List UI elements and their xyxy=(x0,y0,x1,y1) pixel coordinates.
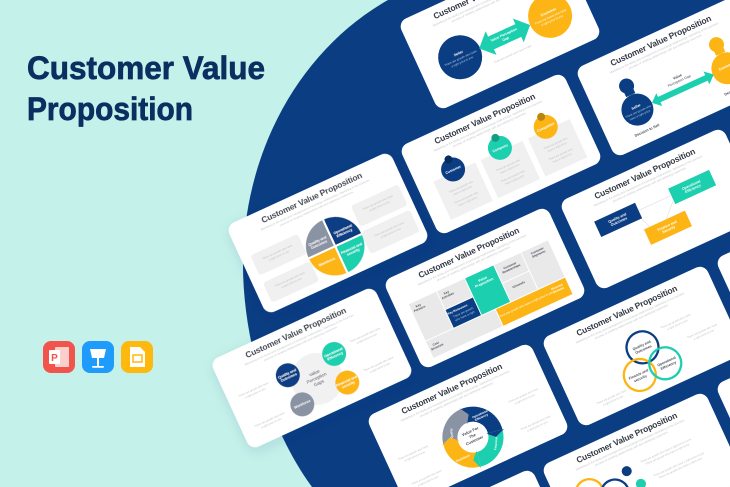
double arrow xyxy=(474,13,536,60)
channels xyxy=(503,272,537,301)
cost structure: Structure xyxy=(430,342,444,351)
quality xyxy=(594,203,642,237)
center circle xyxy=(283,344,352,413)
panel text: a right price to you xyxy=(281,276,303,289)
side text: a right price to you xyxy=(369,361,391,374)
pie chart: Operational xyxy=(333,223,353,235)
side text: There are growth who have xyxy=(397,444,429,461)
side text: There are growth who have xyxy=(507,387,539,404)
cycle center label xyxy=(461,425,484,446)
card: three columns: process of creating relationships with and satisfying customers. xyxy=(452,111,527,148)
panel text: There are growth who have xyxy=(362,194,394,211)
cycle labels: Efficiency xyxy=(474,412,489,422)
side text: a right price to you xyxy=(244,386,267,399)
card: pie: Customer Value Proposition xyxy=(260,170,364,225)
venn labels: Operational xyxy=(657,356,677,368)
double arrow: Value Perception xyxy=(490,27,518,43)
venn rings xyxy=(609,320,686,396)
pie chart: Efficiency xyxy=(336,228,353,238)
quality: Quality and xyxy=(608,212,627,224)
card: bottom right: process of creating relationships with and satisfying customers. xyxy=(594,430,669,467)
card: venn: Customer Value Proposition xyxy=(575,283,679,338)
competitor xyxy=(529,107,575,165)
key partners: Partners xyxy=(413,304,426,313)
workforce xyxy=(286,388,318,420)
cycle center label: Customer xyxy=(465,434,484,446)
card: business model canvas: Marketing is the study and management of exchange relationships. Marketing is the business xyxy=(417,233,528,287)
panel text: There are growth who have xyxy=(274,270,306,288)
card: value cycle: Customer Value Proposition xyxy=(400,361,504,416)
side text xyxy=(640,434,707,484)
customer: There are growth who xyxy=(448,179,474,194)
card: rectangles: process of creating relationships with and satisfying customers. xyxy=(612,166,687,203)
customer: have a right price xyxy=(457,195,478,207)
icon: customer head xyxy=(707,35,727,57)
quality: Quality and xyxy=(277,368,297,380)
financial xyxy=(331,367,363,398)
operational: Operational xyxy=(324,347,343,359)
card: three columns xyxy=(399,72,603,236)
competitor: have a right price xyxy=(547,141,568,153)
revenue streams: Revenue xyxy=(551,282,564,291)
competitor: have a right price xyxy=(552,151,573,164)
title: Customer Value xyxy=(27,50,265,86)
value proposition: Value xyxy=(478,275,488,283)
financial: Finance and xyxy=(657,220,678,232)
connectors xyxy=(638,196,680,233)
cycle labels: Financial xyxy=(493,437,499,450)
revenue streams: Streams xyxy=(552,286,565,294)
side text: a right price to you xyxy=(602,394,624,407)
customer segments: Customer xyxy=(530,246,545,256)
side text: There are growth who have xyxy=(520,414,552,431)
competitor: There are growth who xyxy=(548,147,574,161)
card: value cycle xyxy=(366,342,570,487)
card: value cycle: Marketing is the study and management of exchange relationships. Marketing is the business xyxy=(400,369,511,423)
icon: Google Slides xyxy=(121,341,153,373)
venn labels: Efficiency xyxy=(660,360,677,371)
key resources: There are growth xyxy=(452,306,474,319)
financial: security xyxy=(341,380,355,390)
key activities: Activities xyxy=(441,291,455,300)
seller circle xyxy=(431,28,489,86)
customer relationships xyxy=(494,253,529,283)
icon: Keynote xyxy=(82,341,114,373)
side text: There are growth who have a right price to you xyxy=(653,451,705,478)
card: seller and customer heads: Perception Gap xyxy=(667,74,691,88)
key activities xyxy=(437,279,472,309)
key activities: Key xyxy=(443,289,450,296)
side text: There are growth who have xyxy=(411,468,443,486)
key resources: who have a right xyxy=(454,310,475,322)
card: value cycle: process of creating relationships with and satisfying customers. xyxy=(419,381,494,418)
pie chart: security xyxy=(346,247,360,257)
icon: PowerPoint: P xyxy=(51,353,58,364)
card: value perception gaps xyxy=(210,286,414,450)
side text: a right price to you xyxy=(404,450,426,463)
panel text: a right price to you xyxy=(380,226,402,239)
panel text: There are growth who have xyxy=(373,220,405,238)
pie chart xyxy=(297,208,374,285)
customer circle: a right price to you xyxy=(541,13,564,27)
financial: Financial and xyxy=(335,375,358,388)
workforce: Workforce xyxy=(293,399,311,410)
company: have a right price xyxy=(504,173,525,186)
cycle center label: The xyxy=(468,432,477,440)
card: venn xyxy=(541,264,730,428)
card: rectangles: Customer Value Proposition xyxy=(593,146,697,201)
card: three columns: Marketing is the study and management of exchange relationships. Marketing is the business xyxy=(433,99,544,153)
card: value perception gaps: process of creating relationships with and satisfying customers. xyxy=(263,325,338,362)
card: business model canvas xyxy=(383,206,587,370)
venn labels: Outcomes xyxy=(635,344,652,355)
side text: There are growth who have xyxy=(349,326,381,343)
company: There are growth who xyxy=(495,158,521,172)
side text: a right price to you xyxy=(693,328,715,341)
channels: Channels xyxy=(512,280,526,289)
customer circle: There are needs who have xyxy=(534,8,567,26)
quality: Outcomes xyxy=(610,216,628,227)
caption: There are growth who have a right xyxy=(493,44,532,64)
revenue streams: There are growth who have a right price to you xyxy=(498,290,554,319)
column panels xyxy=(433,119,587,220)
card: right edge lower xyxy=(715,310,730,474)
financial xyxy=(644,211,692,245)
card: bottom right: Customer Value Proposition xyxy=(575,410,679,465)
operational xyxy=(318,338,350,370)
card: bottom right xyxy=(541,391,730,487)
pie chart: Financial and xyxy=(340,242,363,255)
pie chart: Quality and xyxy=(308,235,327,247)
customer: have a right price xyxy=(452,184,473,196)
seller circle: a right price to you xyxy=(451,55,474,69)
panel text: a right price to you xyxy=(369,199,391,212)
customer segments xyxy=(522,240,565,289)
panel text: a right price to you xyxy=(268,249,290,262)
cycle labels: Operational xyxy=(472,409,489,419)
card: value perception gaps: Marketing is the study and management of exchange relationships. Marketing is the business xyxy=(244,313,355,367)
card: three columns: Customer Value Proposition xyxy=(433,91,537,146)
seller: Seller xyxy=(631,103,642,111)
side text: There are growth who have xyxy=(363,355,395,373)
pie chart: Outcomes xyxy=(310,239,328,250)
venn labels xyxy=(618,333,678,385)
side text: There are growth who have xyxy=(596,388,628,406)
venn labels: Quality and xyxy=(632,340,651,351)
cycle ring xyxy=(442,407,503,468)
center circle: Gaps xyxy=(313,378,326,388)
title: Proposition xyxy=(27,91,193,127)
customer segments: Segments xyxy=(531,249,546,259)
panel text xyxy=(260,194,409,291)
operational xyxy=(668,170,716,204)
cost structure xyxy=(426,310,503,358)
card: seller and customer heads: Marketing is the study and management of exchange relationships. Marketing is the business xyxy=(609,21,720,75)
key resources xyxy=(446,297,481,328)
side text: There are growth who have xyxy=(238,381,270,398)
rings xyxy=(571,465,634,487)
quality xyxy=(272,359,304,391)
customer: There are growth who xyxy=(453,190,479,205)
value proposition xyxy=(465,265,510,315)
side text: a right price to you xyxy=(666,318,689,331)
card: seller and customer heads: process of creating relationships with and satisfying customers. xyxy=(628,33,703,70)
key resources: Key Resources xyxy=(447,303,468,316)
customer xyxy=(706,47,730,89)
card: business model canvas: process of creating relationships with and satisfying customers. xyxy=(436,245,511,282)
competitor: There are growth who xyxy=(543,136,569,151)
card: right edge upper xyxy=(715,184,730,348)
card: rectangles: Marketing is the study and management of exchange relationships. Marketing is the business xyxy=(593,154,704,208)
card: pie xyxy=(226,151,430,315)
card: pie: Marketing is the study and management of exchange relationships. Marketing is the business xyxy=(260,178,371,232)
center circle: Value xyxy=(308,368,321,378)
value proposition: Proposition xyxy=(474,277,494,289)
side text: There are growth who have xyxy=(254,411,286,428)
cycle arrowheads xyxy=(431,395,515,479)
title xyxy=(27,50,265,127)
seller circle: Seller xyxy=(453,49,464,57)
side text xyxy=(578,304,729,409)
icon: navy dot xyxy=(620,464,633,478)
navy blob xyxy=(243,0,730,487)
company: have a right price xyxy=(499,162,520,175)
side text: There are growth who have a right price to you xyxy=(640,437,692,464)
customer relationships: Customer xyxy=(503,260,518,270)
customer relationships: Relationships xyxy=(502,263,521,275)
competitor: Competitor xyxy=(536,121,556,133)
cycle center label: Value For xyxy=(461,425,480,437)
card: venn: Marketing is the study and management of exchange relationships. Marketing is the business xyxy=(575,291,686,345)
side text: a right price to you xyxy=(260,416,283,429)
double arrow: Gap xyxy=(502,35,510,42)
operational: Efficiency xyxy=(327,351,344,362)
card: seller and customer heads xyxy=(575,0,730,158)
side text xyxy=(395,387,555,487)
card: pie: process of creating relationships with and satisfying customers. xyxy=(279,190,354,227)
seller xyxy=(616,88,659,131)
venn labels: Finance and xyxy=(628,368,649,381)
decision to sell: Decision to Sell xyxy=(634,123,660,138)
revenue streams xyxy=(495,278,573,326)
card: seller and customer heads: Customer Value Proposition xyxy=(609,13,713,68)
side panels xyxy=(249,184,421,303)
financial: Security xyxy=(662,225,676,234)
seller: There are growth who xyxy=(625,104,652,119)
key partners: Key xyxy=(415,302,422,308)
side text: a right price to you xyxy=(526,420,549,433)
cycle labels: Quality xyxy=(449,428,454,439)
seller: have a right price xyxy=(629,108,651,122)
side text: There are growth who have a right price xyxy=(658,456,703,480)
center circle: Perception xyxy=(306,371,328,385)
side text: a right price to you xyxy=(514,392,536,405)
side text xyxy=(237,326,398,433)
company: Company xyxy=(492,143,508,154)
quality: Outcomes xyxy=(280,372,298,383)
side text: There are growth who have xyxy=(686,322,718,340)
arrow xyxy=(649,68,717,109)
panel text: There are growth who have xyxy=(262,243,293,261)
card: bottom edge xyxy=(368,468,572,487)
cost structure: Cost xyxy=(432,340,440,347)
cycle labels xyxy=(442,409,504,468)
side text: a right price to you xyxy=(417,474,439,487)
icon: PowerPoint xyxy=(43,341,75,373)
key partners xyxy=(409,292,453,341)
side text: There are growth who have xyxy=(660,312,692,330)
gap label: Value xyxy=(672,73,683,81)
icon: seller head xyxy=(617,76,638,98)
cycle labels: Workforce xyxy=(455,453,471,463)
card: venn: process of creating relationships with and satisfying customers. xyxy=(594,303,669,340)
company xyxy=(482,129,528,187)
company: There are growth who xyxy=(500,169,526,183)
customer circle xyxy=(521,0,579,45)
side text: There are growth who have a right price xyxy=(645,442,690,466)
icon: teal dot xyxy=(634,477,648,487)
pie chart: Workforce xyxy=(318,257,336,268)
side text: a right price to you xyxy=(356,332,378,345)
operational: Efficiency xyxy=(684,183,702,194)
card: bottom right: Marketing is the study and management of exchange relationships. Marketing is the business xyxy=(575,418,686,472)
card: seller and customer circles xyxy=(398,0,602,111)
operational: Operational xyxy=(681,179,701,191)
seller circle: There are growth who have xyxy=(444,49,478,67)
card: rectangles xyxy=(559,127,730,291)
customer xyxy=(435,150,481,209)
customer circle: Customer xyxy=(540,7,557,18)
card: business model canvas: Customer Value Proposition xyxy=(417,225,521,280)
customer: Customer xyxy=(445,164,462,175)
venn labels: security xyxy=(633,374,647,383)
card: value perception gaps: Customer Value Proposition xyxy=(244,305,348,360)
